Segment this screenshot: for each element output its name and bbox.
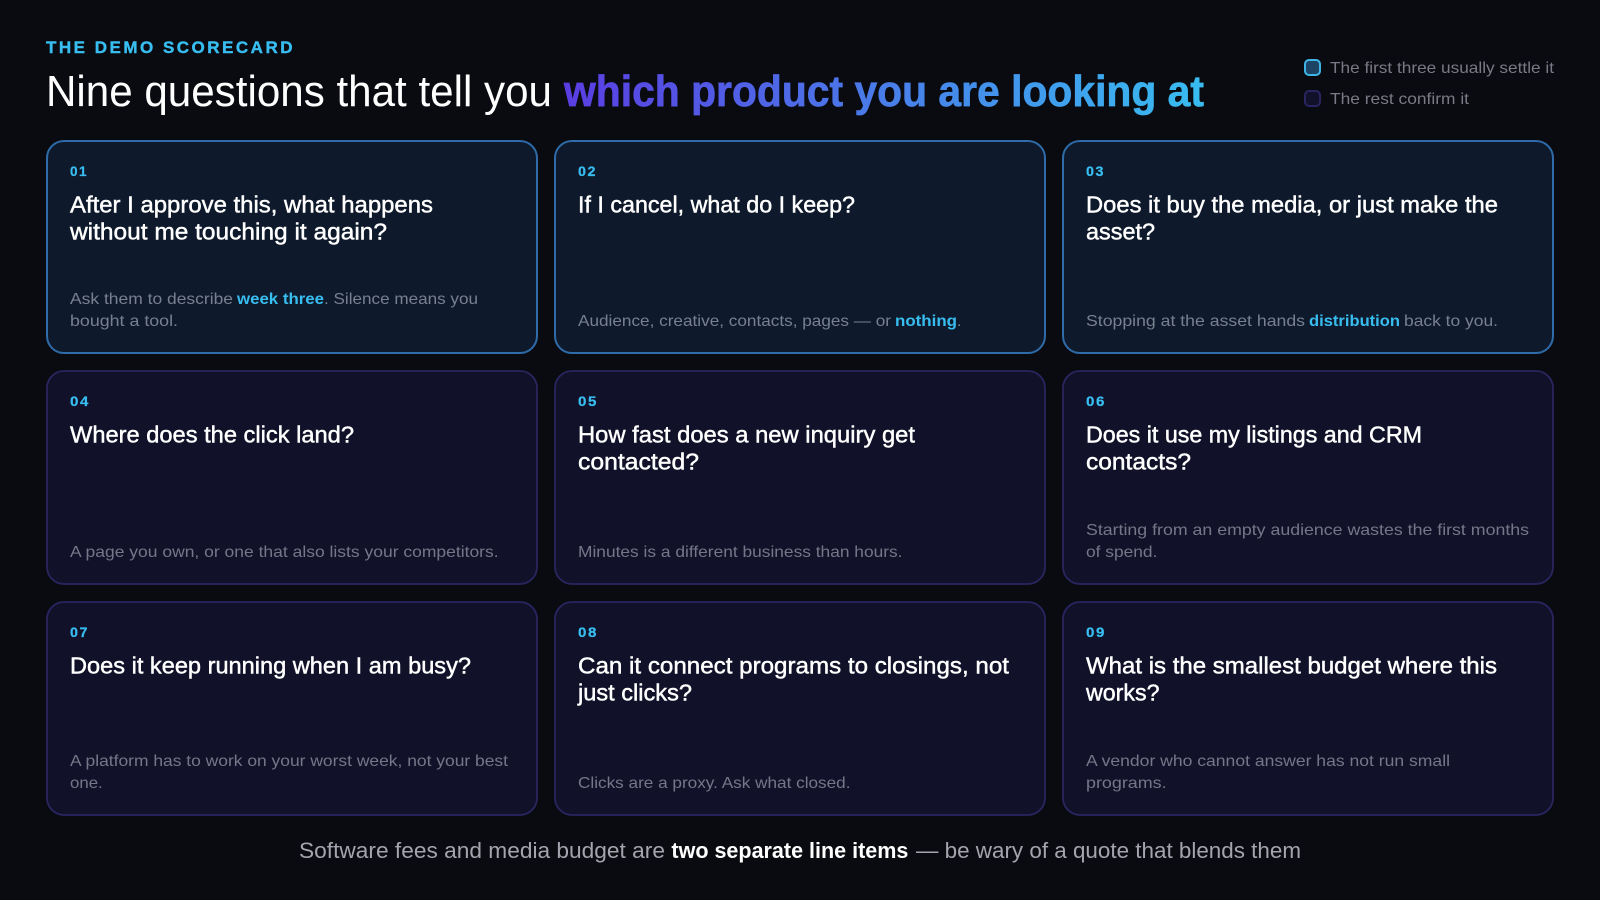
legend item: the rest: The rest confirm it bbox=[1330, 91, 1470, 108]
answer 02: nothing bbox=[895, 313, 957, 330]
panel: card 05 bbox=[555, 371, 1045, 584]
answer 03: back to you. bbox=[1404, 313, 1498, 330]
answer 08: Clicks are a proxy. Ask what closed. bbox=[578, 775, 850, 792]
answer 03 bbox=[1086, 313, 1498, 330]
card number 06: 06 bbox=[1086, 393, 1106, 409]
answer 01: week three bbox=[236, 291, 324, 308]
card number 01: 01 bbox=[70, 163, 88, 179]
answer 07: one. bbox=[70, 775, 103, 792]
answer 09: programs. bbox=[1086, 775, 1167, 792]
title bbox=[46, 67, 1204, 116]
title: which product you are looking at bbox=[563, 67, 1204, 116]
footer note: Software fees and media budget are bbox=[299, 838, 665, 863]
answer 05: Minutes is a different business than hours. bbox=[578, 544, 902, 561]
question 03: asset? bbox=[1086, 218, 1155, 244]
question 01 bbox=[69, 192, 433, 244]
panel: card 01 bbox=[47, 141, 537, 353]
answer 03: distribution bbox=[1309, 313, 1400, 330]
answer 06: of spend. bbox=[1086, 544, 1157, 561]
card number 05: 05 bbox=[578, 393, 598, 409]
footer note: two separate line items bbox=[671, 838, 908, 863]
panel: card 07 bbox=[47, 602, 537, 815]
question 08: Can it connect programs to closings, not bbox=[578, 652, 1010, 678]
question 03: Does it buy the media, or just make the bbox=[1086, 192, 1498, 218]
panel: card 08 bbox=[555, 602, 1045, 815]
question 09: works? bbox=[1085, 680, 1160, 706]
title: Nine questions that tell you bbox=[46, 67, 552, 116]
question 09 bbox=[1085, 652, 1497, 706]
question 06 bbox=[1086, 422, 1422, 474]
answer 01: . Silence means you bbox=[324, 291, 478, 308]
question 07: Does it keep running when I am busy? bbox=[70, 652, 471, 678]
question 03 bbox=[1086, 192, 1498, 244]
question 02: If I cancel, what do I keep? bbox=[578, 192, 855, 218]
panel: card 04 bbox=[47, 371, 537, 584]
answer 03: Stopping at the asset hands bbox=[1086, 313, 1305, 330]
answer 06 bbox=[1086, 522, 1529, 561]
answer 01: bought a tool. bbox=[70, 313, 178, 330]
question 04: Where does the click land? bbox=[70, 422, 354, 448]
question 09: What is the smallest budget where this bbox=[1086, 652, 1497, 678]
card number 03: 03 bbox=[1086, 163, 1105, 179]
card number 02: 02 bbox=[578, 163, 597, 179]
legend item: first three: The first three usually settle it bbox=[1330, 60, 1555, 77]
answer 09: A vendor who cannot answer has not run small bbox=[1086, 753, 1450, 770]
panel: card 02 bbox=[555, 141, 1045, 353]
question 06: Does it use my listings and CRM bbox=[1086, 422, 1422, 448]
footer note: — be wary of a quote that blends them bbox=[916, 838, 1301, 863]
question 05: contacted? bbox=[578, 448, 699, 474]
card number 04: 04 bbox=[70, 393, 90, 409]
answer 07 bbox=[70, 753, 509, 792]
card number 08: 08 bbox=[578, 624, 598, 640]
eyebrow heading: THE DEMO SCORECARD bbox=[46, 38, 295, 57]
question 01: without me touching it again? bbox=[69, 218, 387, 244]
answer 09 bbox=[1086, 753, 1450, 792]
question 01: After I approve this, what happens bbox=[70, 192, 433, 218]
panel: card 06 bbox=[1063, 371, 1553, 584]
answer 02: Audience, creative, contacts, pages — or bbox=[578, 313, 892, 330]
question 05: How fast does a new inquiry get bbox=[578, 422, 916, 448]
question 05 bbox=[578, 422, 916, 474]
card number 09: 09 bbox=[1086, 624, 1106, 640]
answer 06: Starting from an empty audience wastes the first months bbox=[1086, 522, 1529, 539]
answer 07: A platform has to work on your worst week, not your best bbox=[70, 753, 509, 770]
question 08: just clicks? bbox=[577, 680, 692, 706]
question 08 bbox=[577, 652, 1010, 706]
footer note bbox=[299, 838, 1301, 863]
panel: card 03 bbox=[1063, 141, 1553, 353]
answer 02: . bbox=[957, 313, 961, 330]
answer 04: A page you own, or one that also lists your competitors. bbox=[70, 544, 499, 561]
question 06: contacts? bbox=[1086, 448, 1191, 474]
answer 01: Ask them to describe bbox=[70, 291, 233, 308]
answer 01 bbox=[70, 291, 478, 330]
panel: card 09 bbox=[1063, 602, 1553, 815]
legend bbox=[1305, 60, 1555, 108]
card number 07: 07 bbox=[70, 624, 89, 640]
